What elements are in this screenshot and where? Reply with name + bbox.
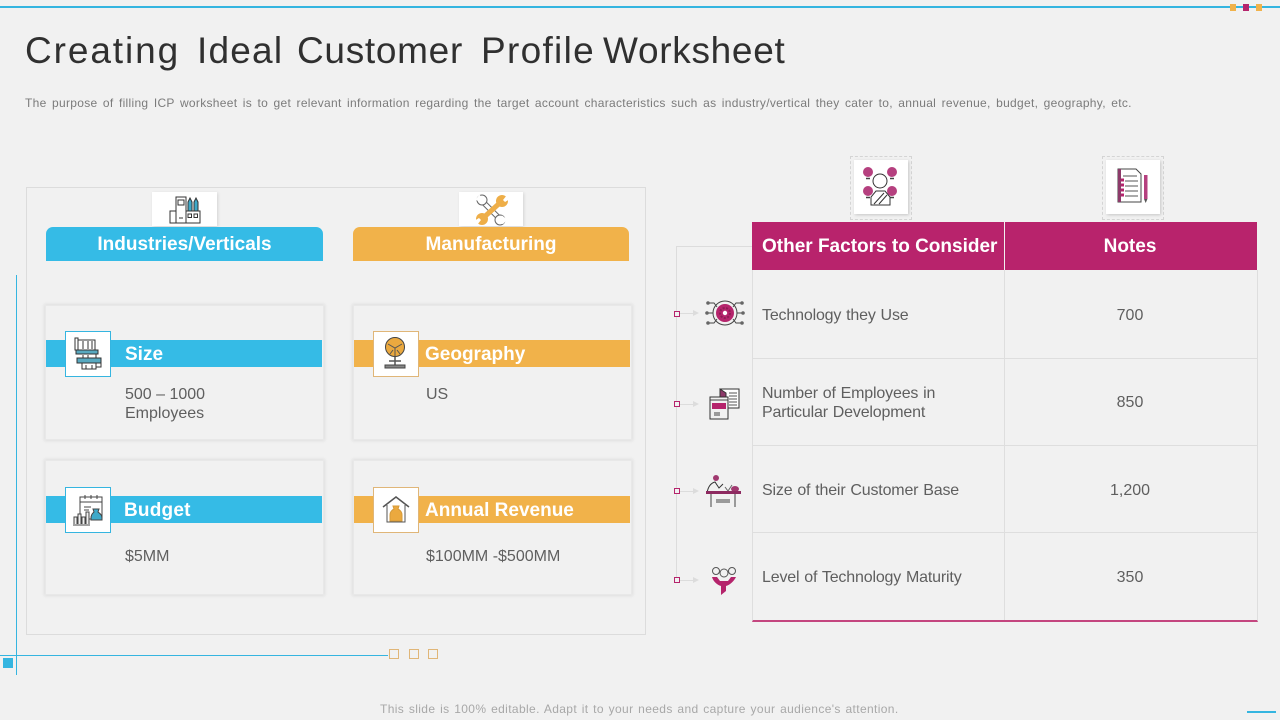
icon: size: [65, 331, 111, 377]
Geography value: US: [426, 386, 448, 403]
Size value: 500 – 1000: [125, 386, 205, 403]
icon: technology gear: [705, 300, 745, 326]
row value: 700: 700: [1117, 307, 1143, 324]
card: Annual Revenue: [353, 460, 632, 595]
panel: company profile: [26, 187, 646, 635]
Annual Revenue band: [354, 496, 630, 523]
row text: Technology they Use: Technology they Use: [762, 307, 909, 324]
icon: industries factory: [152, 192, 217, 226]
card: Geography: [353, 305, 632, 440]
table header: Other Factors to Consider: [752, 222, 1004, 270]
icon: other factors: [850, 156, 912, 220]
row text: Level of Technology Maturity: Level of Technology Maturity: [762, 569, 962, 586]
Geography label: Geography: [425, 344, 525, 365]
top accent line: [0, 6, 1280, 8]
card: Budget: [45, 460, 324, 595]
row value: 350: 350: [1117, 569, 1143, 586]
table header: Notes: Notes: [1104, 236, 1156, 257]
row text: Number of Employees: [762, 385, 935, 421]
footer note: This slide is 100% editable. Adapt it to your needs and capture your audience's attention.: [380, 702, 899, 716]
title: Worksheet: [603, 30, 785, 71]
Size band: [46, 340, 322, 367]
icon: geography: [373, 331, 419, 377]
title: Profile: [481, 30, 595, 71]
table: other factors and notes: [752, 222, 1257, 270]
Annual Revenue value: $100MM -$500MM: [426, 548, 560, 565]
table header: Other Factors to Consider: Other Factors to Consider: [762, 236, 997, 257]
Budget value: $5MM: [125, 548, 169, 565]
card: Size: [45, 305, 324, 440]
bottom right accent line: [1247, 711, 1276, 713]
row text: Size of their Customer Base: Size of their Customer Base: [762, 482, 959, 499]
icon: manufacturing tools: [459, 192, 523, 226]
row text: Number of Employees: Number of Employees in: [762, 385, 935, 402]
Annual Revenue label: Annual Revenue: [425, 500, 574, 521]
row value: 850: 850: [1117, 394, 1143, 411]
icon: annual revenue: [373, 487, 419, 533]
Size value: Employees: [125, 405, 204, 422]
icon: customer desk: [706, 475, 741, 507]
header: Manufacturing: Manufacturing: [426, 234, 556, 255]
Geography band: [354, 340, 630, 367]
row text: Number of Employees: Particular Development: [762, 404, 925, 421]
header: Manufacturing: [353, 227, 629, 261]
Size value: [125, 386, 205, 422]
connector: factors bracket: [676, 246, 752, 580]
icon: employee documents: [710, 388, 740, 420]
title: Creating: [25, 30, 180, 71]
Budget label: Budget: [124, 500, 191, 521]
header: Industries/Verticals: [46, 227, 323, 261]
connector nodes: [674, 310, 698, 583]
Size label: Size: [125, 344, 163, 365]
icon: budget: [65, 487, 111, 533]
table grid lines: [752, 270, 1258, 622]
icon: maturity funnel: [712, 567, 736, 595]
title: Customer: [297, 30, 463, 71]
left decorative frame lines: [0, 275, 438, 675]
icon: notes: [1102, 156, 1164, 220]
header: Industries/Verticals: Industries/Verticals: [97, 234, 272, 255]
Budget band: [46, 496, 322, 523]
table header: Notes: [1005, 222, 1257, 270]
title: Ideal: [197, 30, 283, 71]
row value: 1,200: 1,200: [1110, 482, 1150, 499]
title: [25, 30, 785, 71]
subtitle: The purpose of filling ICP worksheet is to get relevant information regarding the target account characteristics such as industry/vertical they cater to, annual revenue, budget, geography, etc.: [25, 96, 1132, 110]
top right accent squares: [1230, 4, 1262, 11]
